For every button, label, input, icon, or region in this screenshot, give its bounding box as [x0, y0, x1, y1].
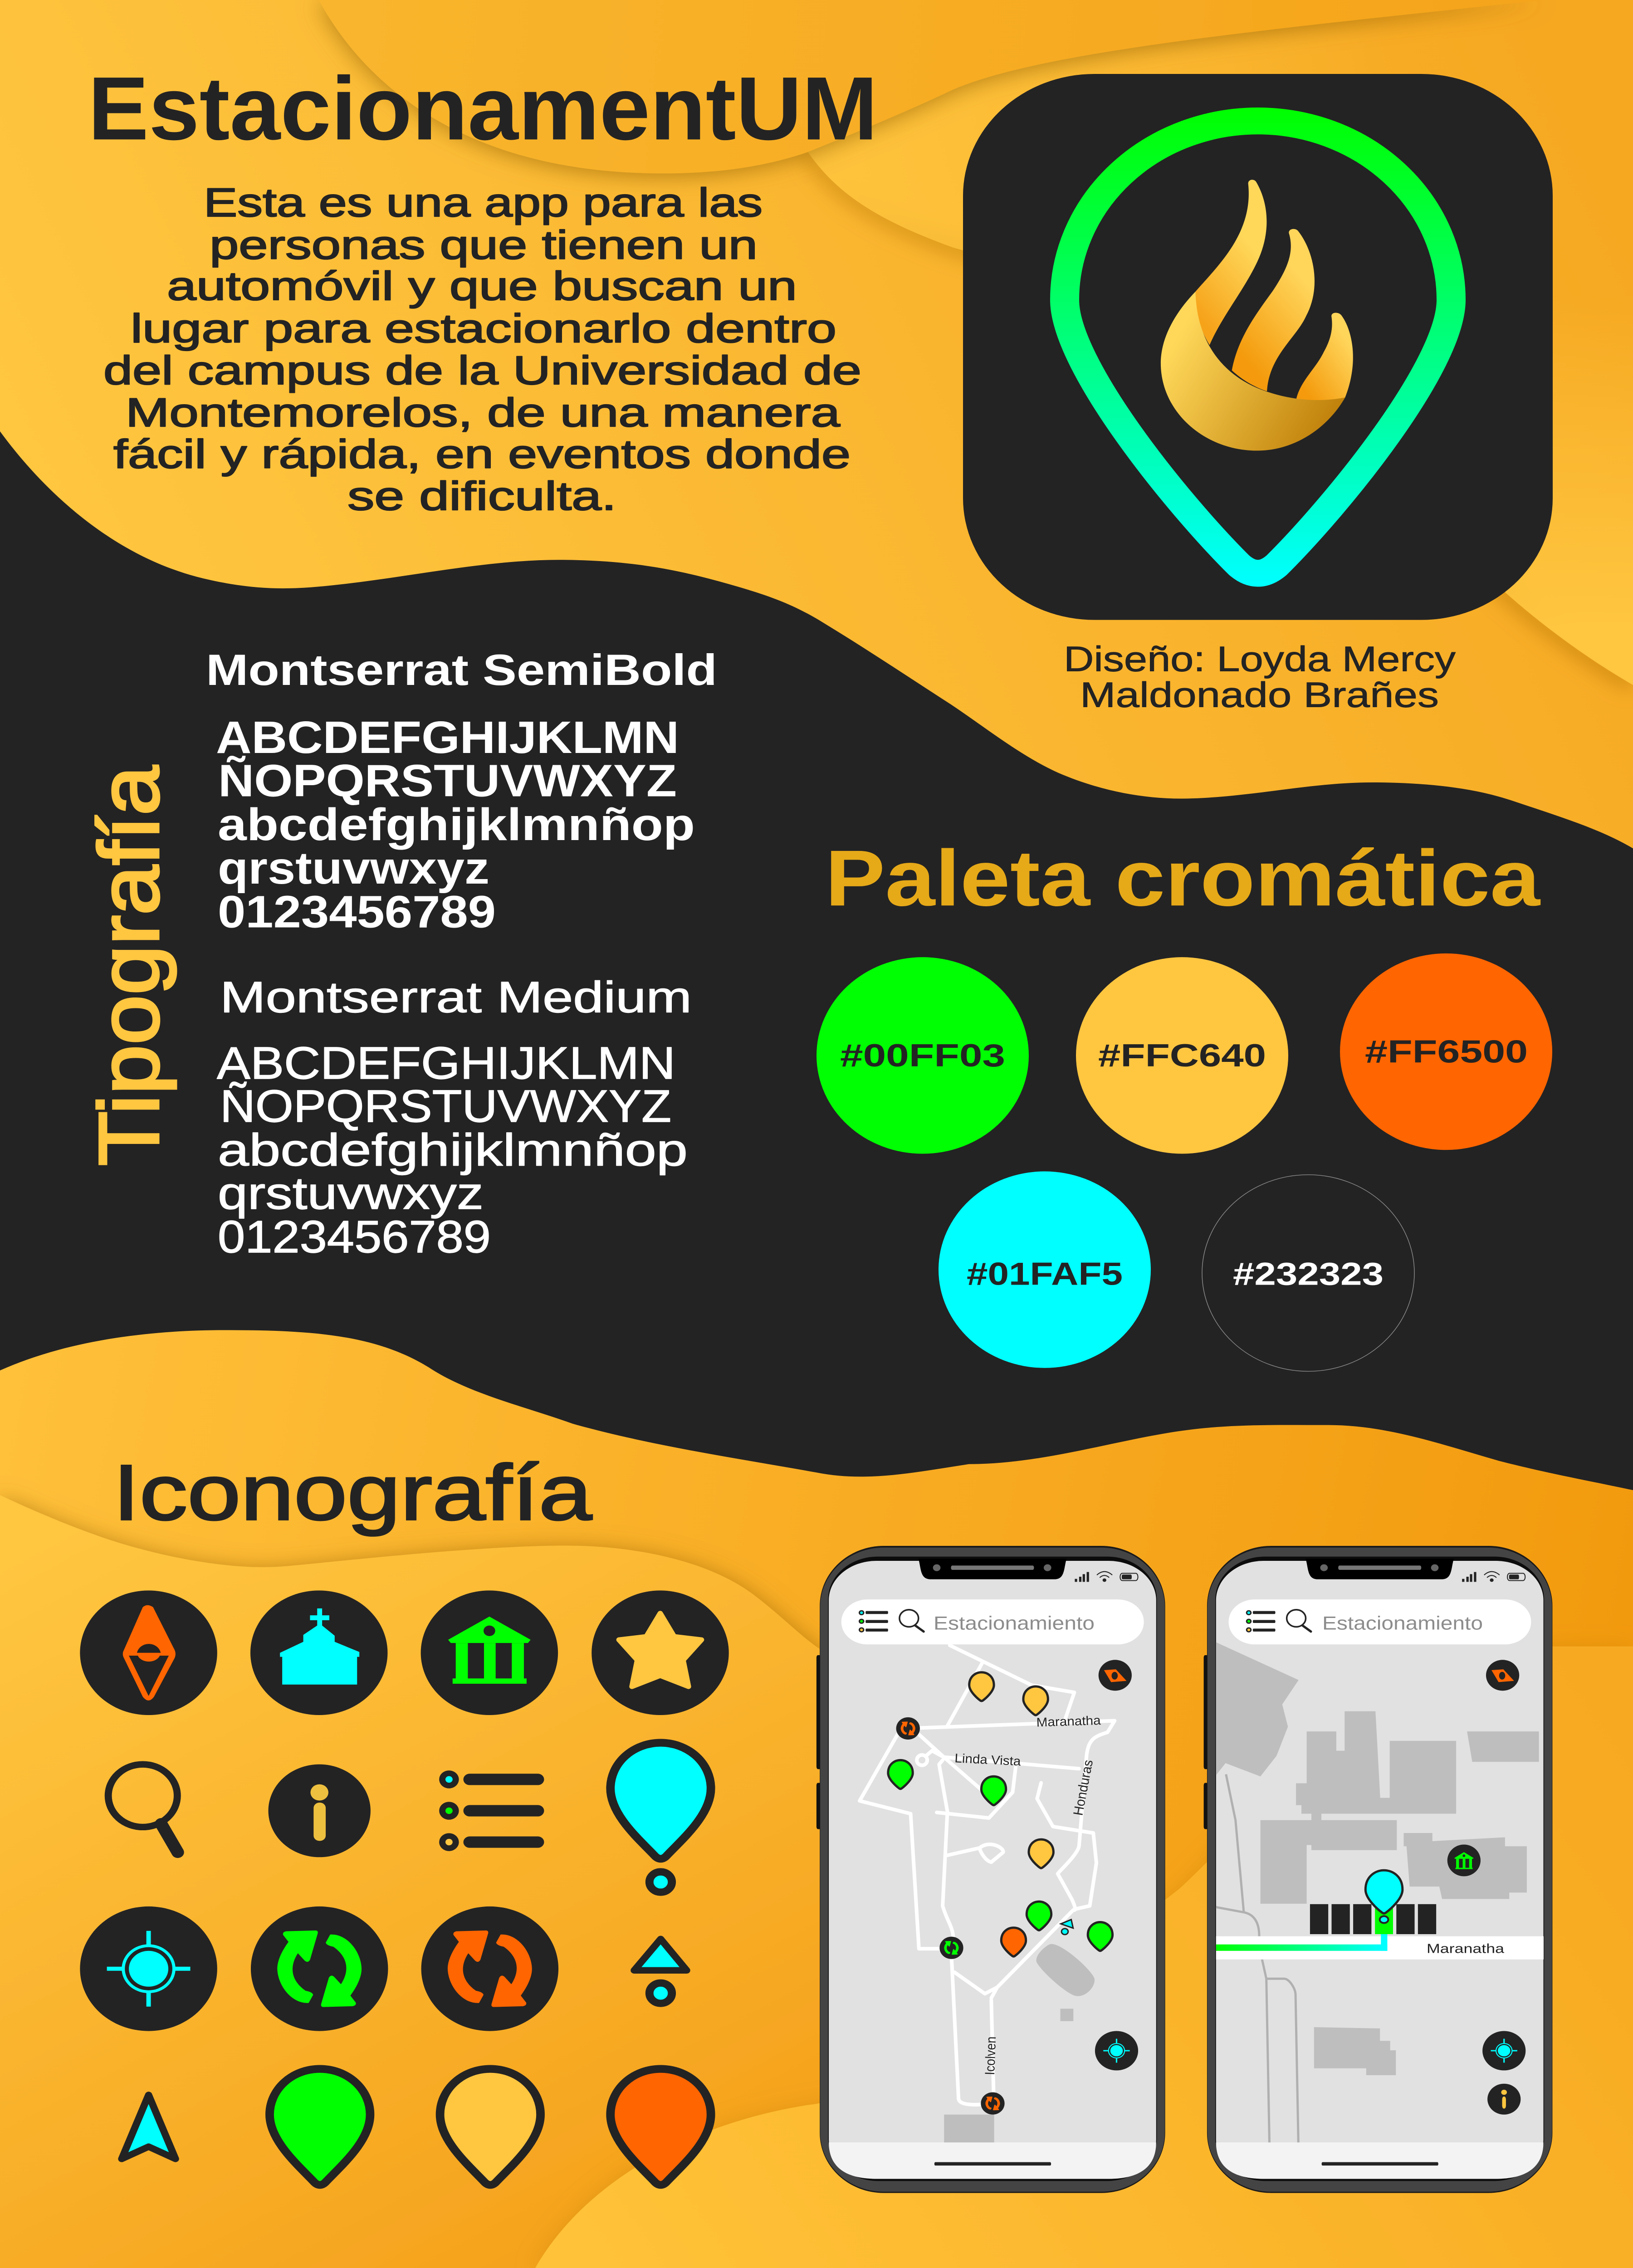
type specimen: Montserrat Medium: qrstuvwxyz: [218, 1168, 484, 1219]
icon: cyan destination pin: [611, 1743, 711, 1892]
map: compass button: [1099, 1660, 1132, 1691]
heading: Paleta cromática: Paleta cromática: [825, 834, 1541, 923]
designer credit: Maldonado Brañes: [1080, 675, 1439, 715]
icon: triangle marker: [634, 1939, 687, 2004]
icon: info: [269, 1765, 371, 1857]
swatch: green: [816, 957, 1029, 1154]
street label: Maranatha: [1427, 1942, 1504, 1956]
street labels: Linda Vista: [954, 1751, 1022, 1769]
search placeholder: Estacionamiento: [1322, 1613, 1483, 1634]
map: buildings: [1216, 1642, 1539, 2075]
background: lower left light wave: [0, 1495, 885, 2268]
street labels: Honduras: [1071, 1759, 1096, 1817]
text block: app description: lugar para estacionarlo dentro: [131, 306, 836, 351]
background: top orange wave: [319, 0, 1542, 173]
map: side roads: [1216, 1774, 1298, 2142]
icon: star: [592, 1590, 729, 1715]
background: lower orange field: [0, 1260, 1633, 2268]
map: compass button: [1486, 1660, 1519, 1691]
phone mockup: campus map: [816, 1546, 1165, 2193]
icon: navigation arrow: [122, 2095, 176, 2159]
swatch: cyan: #01FAF5: [967, 1256, 1123, 1292]
text block: app description: se dificulta.: [347, 473, 616, 518]
type specimen: Montserrat SemiBold: ÑOPQRSTUVWXYZ: [218, 756, 677, 807]
type specimen: Montserrat SemiBold: qrstuvwxyz: [218, 843, 489, 894]
text block: app description: Esta es una app para las: [204, 180, 763, 225]
map: main street: [1216, 1936, 1544, 1960]
swatch: yellow: [1076, 957, 1288, 1154]
icon: yellow pin: [440, 2069, 541, 2185]
designer credit: Diseño: Loyda Mercy: [1064, 640, 1456, 679]
type specimen: Montserrat Medium: Montserrat Medium: [220, 973, 692, 1022]
icon: green pin: [269, 2069, 370, 2185]
text block: app description: del campus de la Universidad de: [103, 348, 861, 393]
type specimen: Montserrat Medium: [217, 973, 692, 1262]
heading: Tipografía: Tipografía: [82, 766, 176, 1166]
icon: list menu: [439, 1770, 544, 1851]
swatch: orange: #FF6500: [1365, 1034, 1528, 1070]
phone mockup: parking detail: [1204, 1546, 1552, 2193]
icon: orange pin: [611, 2069, 711, 2185]
map: roads: [860, 1645, 1115, 2105]
type specimen: Montserrat Medium: ÑOPQRSTUVWXYZ: [220, 1081, 671, 1132]
swatch: orange: [1340, 953, 1552, 1150]
map: buildings: [944, 1944, 1095, 2142]
search placeholder: Estacionamiento: [934, 1613, 1095, 1634]
type specimen: Montserrat Medium: abcdefghijklmnñop: [218, 1125, 688, 1176]
map: locate button: [1095, 2031, 1138, 2070]
icon: orange refresh: [421, 1906, 558, 2031]
swatch: yellow: #FFC640: [1098, 1038, 1266, 1073]
designer credit: [1064, 640, 1456, 715]
background: lighter layer below top wave: [771, 0, 1406, 273]
logo: location pin outline: [1065, 121, 1451, 573]
icon grid: [80, 1590, 729, 2185]
icon: locate crosshair: [80, 1906, 217, 2031]
title: EstacionamentUM: [88, 58, 878, 159]
app logo tile: [963, 74, 1553, 620]
background: shadow under lighter layer: [808, 152, 1043, 273]
type specimen: Montserrat Medium: ABCDEFGHIJKLMN: [217, 1038, 675, 1089]
map: refresh markers: [896, 1717, 1005, 2115]
map: route line: [1216, 1934, 1387, 1951]
text block: app description: [103, 180, 861, 518]
background: dark central wave: [0, 431, 1633, 1490]
text block: app description: automóvil y que buscan un: [167, 263, 797, 308]
map: parking pins: [888, 1672, 1113, 1956]
type specimen: Montserrat Medium: 0123456789: [218, 1212, 491, 1262]
text block: app description: personas que tienen un: [210, 222, 758, 268]
type specimen: Montserrat SemiBold: ABCDEFGHIJKLMN: [216, 713, 679, 763]
street labels: [954, 1714, 1101, 2075]
type specimen: Montserrat SemiBold: Montserrat SemiBold: [206, 646, 717, 694]
type specimen: Montserrat SemiBold: 0123456789: [218, 887, 496, 938]
background: upper yellow field: [0, 0, 1633, 1260]
icon: compass: [80, 1590, 217, 1715]
icon: search: [108, 1765, 178, 1853]
type specimen: Montserrat SemiBold: [206, 646, 717, 938]
swatch: dark: [1202, 1175, 1414, 1371]
icon: church: [250, 1590, 387, 1715]
map: parking spaces: [1310, 1904, 1436, 1934]
swatch: cyan: [939, 1171, 1151, 1368]
icon: museum: [421, 1590, 558, 1715]
map: user position marker: [1061, 1920, 1073, 1935]
background: shadow of right wedge: [1474, 563, 1633, 685]
text block: app description: Montemorelos, de una manera: [126, 390, 841, 435]
map: locate button: [1482, 2031, 1525, 2070]
background: bottom right light wave: [535, 1647, 1633, 2268]
heading: Iconografía: Iconografía: [113, 1449, 592, 1536]
map: info button: [1487, 2084, 1521, 2115]
map: museum button: [1447, 1845, 1481, 1876]
text block: app description: fácil y rápida, en eventos donde: [113, 431, 851, 477]
map: destination pin: [1365, 1870, 1403, 1923]
type specimen: Montserrat SemiBold: abcdefghijklmnñop: [218, 799, 695, 850]
street labels: Icolven: [983, 2036, 999, 2075]
background: right light wedge: [1474, 294, 1633, 685]
street labels: Maranatha: [1036, 1714, 1101, 1730]
swatch: dark: #232323: [1233, 1256, 1384, 1292]
icon: green refresh: [251, 1906, 388, 2031]
logo: flame: [1161, 180, 1353, 451]
swatch: green: #00FF03: [840, 1038, 1005, 1073]
